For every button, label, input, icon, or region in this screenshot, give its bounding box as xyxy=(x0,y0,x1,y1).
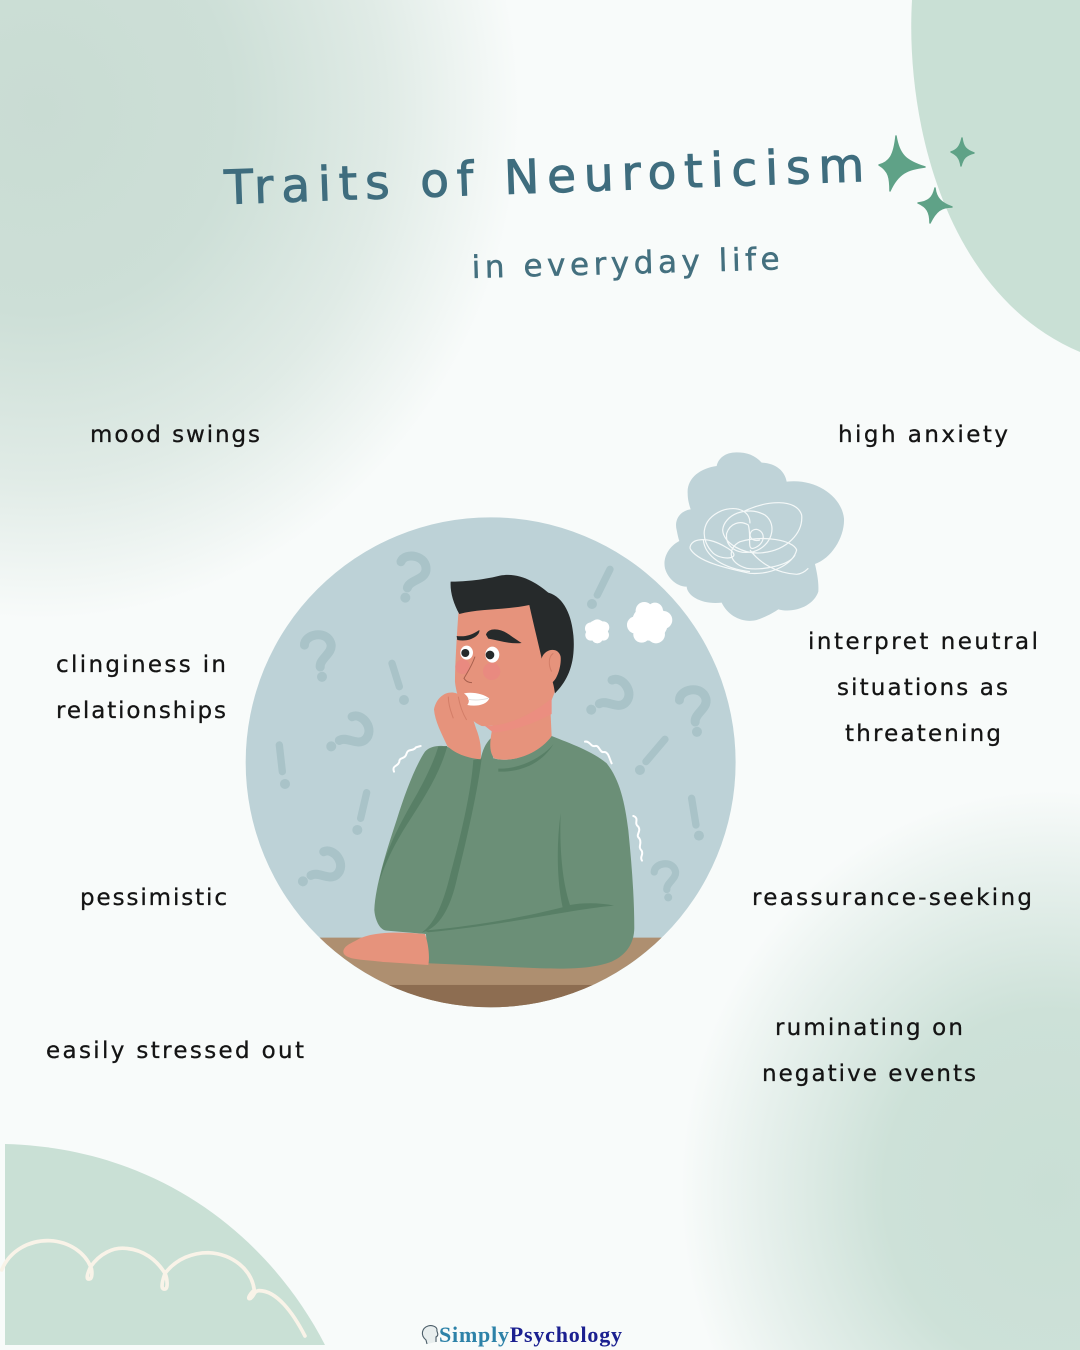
white thought puffs xyxy=(585,602,672,643)
eyebrows xyxy=(457,629,522,643)
nose xyxy=(464,657,475,683)
logo wordmark: SimplyPsychology xyxy=(439,1322,622,1347)
illustration: worried man in circle xyxy=(240,517,740,1012)
logo: Simply Psychology xyxy=(422,1322,622,1347)
trait: easily stressed out: easily stressed out xyxy=(46,1038,304,1064)
trait: clinginess in relationships: clinginess in xyxy=(56,652,226,678)
trait: pessimistic: pessimistic xyxy=(80,885,227,911)
icon: sparkles xyxy=(879,136,974,223)
raised hand xyxy=(434,692,481,759)
background: top-right blob xyxy=(911,0,1080,352)
teeth xyxy=(464,693,489,706)
title: Traits of Neuroticism xyxy=(222,138,865,216)
background: top-left soft gradient xyxy=(0,0,520,620)
trait: interpret neutral situations as threatening xyxy=(808,629,1038,747)
neck shadow xyxy=(485,698,552,733)
sweater fold lines xyxy=(379,744,614,933)
face xyxy=(455,603,562,726)
trait: mood swings: mood swings xyxy=(90,422,260,448)
trait: ruminating on negative events: negative events xyxy=(762,1061,976,1087)
trait: reassurance-seeking: reassurance-seeking xyxy=(752,885,1032,911)
background question and exclamation marks xyxy=(279,555,714,903)
ear xyxy=(542,650,561,682)
trait: interpret neutral situations as threatening: interpret neutral xyxy=(808,629,1038,655)
resting hand xyxy=(343,933,429,965)
background: bottom-left blob with scallop line xyxy=(2,1144,325,1345)
icon: thought cloud with scribble xyxy=(664,452,844,621)
trait: ruminating on negative events xyxy=(762,1015,976,1087)
trait: clinginess in relationships: relationships xyxy=(56,698,226,724)
subtitle: in everyday life xyxy=(471,241,780,286)
neck xyxy=(490,700,552,760)
trait: clinginess in relationships xyxy=(56,652,226,724)
eyes xyxy=(460,646,499,663)
trait: interpret neutral situations as threatening: situations as xyxy=(837,675,1008,701)
hair xyxy=(451,575,574,693)
trait: interpret neutral situations as threatening: threatening xyxy=(845,721,1001,747)
background: bottom-right soft gradient xyxy=(680,790,1080,1350)
icon: head xyxy=(422,1326,438,1344)
table xyxy=(320,938,662,1008)
shiver lines xyxy=(393,742,642,861)
trait: high anxiety: high anxiety xyxy=(838,422,1008,448)
cheeks xyxy=(455,659,500,680)
trait: ruminating on negative events: ruminating on xyxy=(775,1015,963,1041)
circle backdrop xyxy=(246,517,736,1007)
sweater xyxy=(374,736,634,969)
